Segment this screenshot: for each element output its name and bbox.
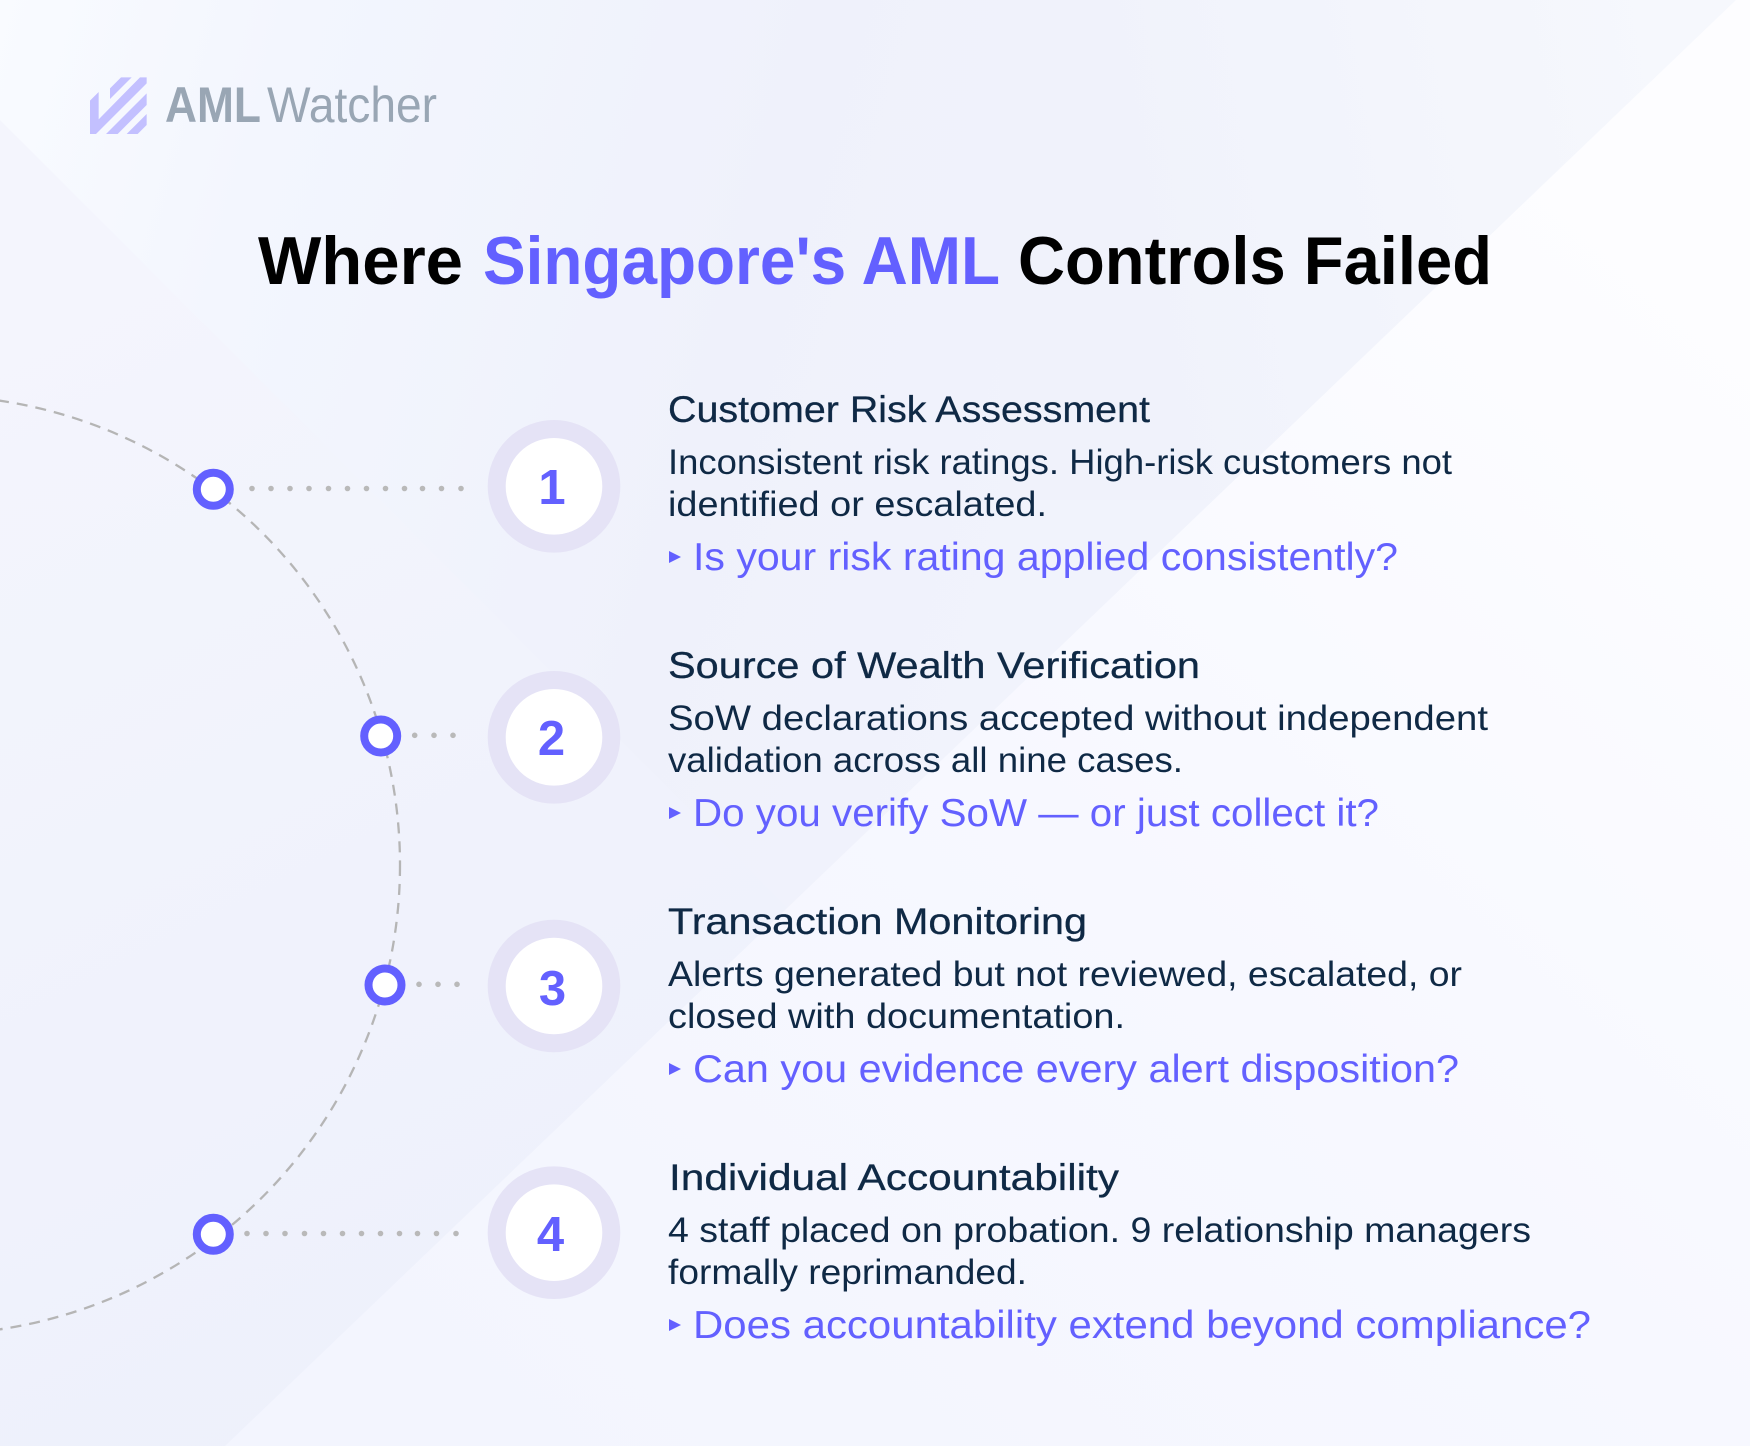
- title: Where: [258, 223, 463, 299]
- item 4: Individual Accountability: 4 staff placed on probation. 9 relationship managers: [668, 1211, 1531, 1250]
- item 2: Source of Wealth Verification: [668, 644, 1488, 835]
- logo wordmark: [165, 77, 437, 133]
- timeline item 3 connector: [368, 968, 460, 1002]
- timeline item 2 connector: [364, 720, 456, 752]
- item 1: Customer Risk Assessment: Inconsistent risk ratings. High-risk customers not: [668, 443, 1452, 482]
- title: Singapore's AML: [483, 223, 1000, 299]
- item 4: Individual Accountability: Individual Accountability: [669, 1156, 1119, 1198]
- number badge 3: 3: [539, 962, 566, 1016]
- timeline item 1 connector: [197, 473, 464, 506]
- number badge 1: [497, 429, 611, 544]
- number badge 3: [497, 929, 611, 1043]
- number badge 1: 1: [538, 461, 566, 515]
- title: Controls Failed: [1018, 223, 1492, 299]
- item 4: Individual Accountability: formally reprimanded.: [668, 1253, 1027, 1292]
- item 3: Transaction Monitoring: Alerts generated but not reviewed, escalated, or: [668, 955, 1462, 994]
- item 4: Individual Accountability: [668, 1156, 1591, 1347]
- item 3: Transaction Monitoring: closed with documentation.: [668, 997, 1125, 1036]
- item 3: Transaction Monitoring: Transaction Monitoring: [668, 900, 1087, 942]
- item 1: Customer Risk Assessment: [668, 388, 1452, 579]
- item 2: Source of Wealth Verification: Source of Wealth Verification: [668, 644, 1200, 686]
- number badge 4: [497, 1175, 611, 1290]
- item 3: Transaction Monitoring: [668, 900, 1462, 1091]
- item 2: Source of Wealth Verification: Do you verify SoW — or just collect it?: [693, 792, 1379, 835]
- item 2: Source of Wealth Verification: validation across all nine cases.: [668, 741, 1183, 780]
- timeline item 4 connector: [197, 1218, 459, 1251]
- item 4: Individual Accountability: Does accountability extend beyond compliance?: [693, 1304, 1591, 1347]
- icon: logo mark: [90, 77, 147, 134]
- title: [258, 223, 1492, 299]
- number badge 2: [497, 680, 611, 795]
- number badge 2: 2: [538, 712, 565, 766]
- item 1: Customer Risk Assessment: Is your risk rating applied consistently?: [693, 536, 1398, 579]
- number badge 4: 4: [537, 1208, 564, 1262]
- logo wordmark: AML: [165, 77, 261, 133]
- item 2: Source of Wealth Verification: SoW declarations accepted without independent: [668, 699, 1488, 738]
- item 1: Customer Risk Assessment: Customer Risk Assessment: [668, 388, 1151, 430]
- item 3: Transaction Monitoring: Can you evidence every alert disposition?: [693, 1048, 1459, 1091]
- logo: AML Watcher: [90, 77, 437, 134]
- dashed arc: [0, 396, 400, 1334]
- logo wordmark: Watcher: [267, 77, 437, 133]
- item 1: Customer Risk Assessment: identified or escalated.: [668, 485, 1047, 524]
